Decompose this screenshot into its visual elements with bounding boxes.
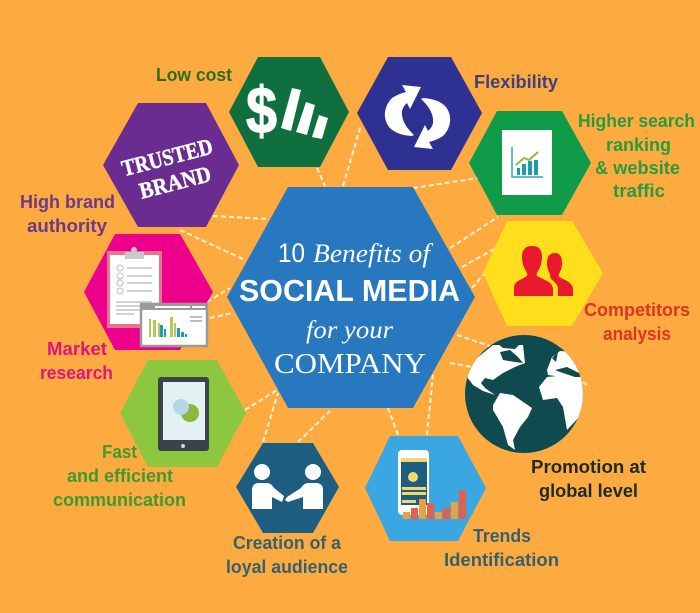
icon: clipboard — [107, 247, 162, 328]
label: competitors analysis: Competitors — [584, 300, 690, 320]
label: competitors analysis: analysis — [603, 324, 671, 344]
panel: trusted brand — [103, 103, 239, 227]
label: higher search ranking: traffic — [613, 181, 665, 201]
panel: flexibility — [357, 57, 482, 170]
icon: trusted brand stamp: BRAND — [137, 161, 214, 204]
icon: trusted brand stamp: TRUSTED — [119, 134, 215, 181]
label: higher search ranking: Higher search — [578, 111, 695, 131]
label: trends identification: Trends — [473, 526, 531, 546]
central hexagon: title: SOCIAL MEDIA — [239, 273, 460, 308]
label: promotion at global level — [531, 457, 646, 501]
panel: communication — [120, 360, 246, 467]
label: creation of a loyal audience: loyal audience — [226, 557, 348, 577]
label: higher search ranking: ranking — [606, 135, 671, 155]
icon: exchange arrows — [385, 85, 450, 149]
label: flexibility: Flexibility — [474, 72, 558, 92]
label: promotion at global level: global level — [539, 481, 638, 501]
label: market research: research — [40, 363, 113, 383]
label: fast and efficient communication — [53, 442, 186, 510]
label: low cost: Low cost — [156, 65, 232, 85]
label: trends identification: Identification — [444, 550, 559, 570]
central hexagon: title — [227, 187, 475, 408]
central hexagon: title: for your — [306, 317, 393, 344]
icon: handshake — [252, 464, 323, 509]
icon: growth chart — [502, 130, 552, 195]
panel: low cost — [229, 57, 349, 167]
label: fast and efficient communication: Fast — [102, 442, 137, 462]
label: promotion at global level: Promotion at — [531, 457, 646, 477]
label: creation of a loyal audience: Creation of a — [233, 533, 342, 553]
icon: trusted brand stamp — [119, 134, 215, 204]
label: high brand authority — [20, 192, 115, 236]
panel: trends identification — [365, 436, 486, 541]
label: creation of a loyal audience — [226, 533, 348, 577]
label: fast and efficient communication: communication — [53, 490, 186, 510]
label: higher search ranking: & website — [595, 158, 680, 178]
icon: dollar and bars: $ — [246, 73, 277, 147]
panel: competitors — [483, 221, 603, 326]
label: competitors analysis — [584, 300, 690, 344]
central hexagon: title: Benefits of — [313, 239, 434, 268]
panel: loyal audience — [236, 443, 339, 533]
panel: market research — [84, 234, 213, 350]
label: fast and efficient communication: and efficient — [67, 466, 173, 486]
label: market research — [40, 339, 113, 383]
panel: search ranking — [469, 111, 591, 215]
icon: two people — [514, 246, 573, 296]
icon: tablet with chat bubbles — [158, 377, 209, 451]
label: higher search ranking — [578, 111, 695, 201]
label: high brand authority: High brand — [20, 192, 115, 212]
central hexagon: title: COMPANY — [274, 349, 426, 380]
label: market research: Market — [47, 339, 107, 359]
central hexagon: title: 10 — [278, 238, 305, 268]
icon: phone and bars — [398, 450, 466, 519]
label: trends identification — [444, 526, 559, 570]
label: high brand authority: authority — [27, 216, 107, 236]
icon: browser chart — [141, 304, 207, 346]
icon: globe — [465, 335, 583, 453]
